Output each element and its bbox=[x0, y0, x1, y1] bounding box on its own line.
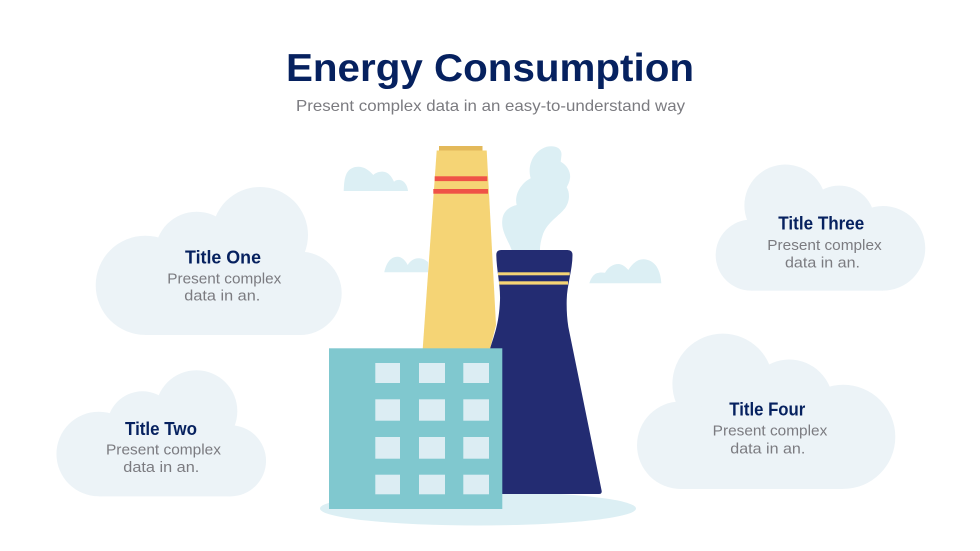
subtitle: Present complex data in an easy-to-understand way bbox=[296, 98, 685, 115]
heading: title three: Title Three bbox=[778, 214, 864, 234]
text: body three: Present complex bbox=[767, 238, 882, 254]
text: body four: Present complex bbox=[713, 424, 828, 440]
building bbox=[329, 348, 502, 509]
icon: small cloud right bbox=[589, 259, 661, 283]
text: body one: data in an. bbox=[184, 289, 260, 305]
text: body three: data in an. bbox=[785, 255, 860, 271]
text: body one: Present complex bbox=[167, 271, 282, 287]
heading: title one: Title One bbox=[185, 247, 261, 267]
text: body two: data in an. bbox=[123, 460, 199, 476]
cloud shape three bbox=[716, 165, 925, 291]
text: body one bbox=[167, 271, 282, 305]
panel: cloud one bbox=[96, 187, 342, 335]
panel: cloud two bbox=[56, 370, 266, 496]
text: body two bbox=[106, 443, 222, 476]
icon: small cloud middle bbox=[384, 257, 428, 272]
panel: cloud three bbox=[716, 165, 925, 291]
text: body four bbox=[713, 424, 828, 457]
title: Energy Consumption bbox=[286, 47, 694, 90]
tall chimney bbox=[423, 146, 496, 349]
cooling tower bbox=[490, 250, 602, 494]
icon: small cloud top left bbox=[344, 167, 408, 191]
smoke bbox=[502, 146, 570, 250]
heading: title two: Title Two bbox=[125, 419, 197, 439]
text: body two: Present complex bbox=[106, 443, 222, 459]
panel: cloud four bbox=[637, 334, 895, 489]
cloud shape one bbox=[96, 187, 342, 335]
ground ellipse bbox=[320, 492, 636, 526]
icon: factory bbox=[329, 146, 602, 509]
cloud shape four bbox=[637, 334, 895, 489]
cloud shape two bbox=[56, 370, 266, 496]
heading: title four: Title Four bbox=[729, 399, 805, 419]
text: body three bbox=[767, 238, 882, 271]
text: body four: data in an. bbox=[730, 441, 805, 457]
